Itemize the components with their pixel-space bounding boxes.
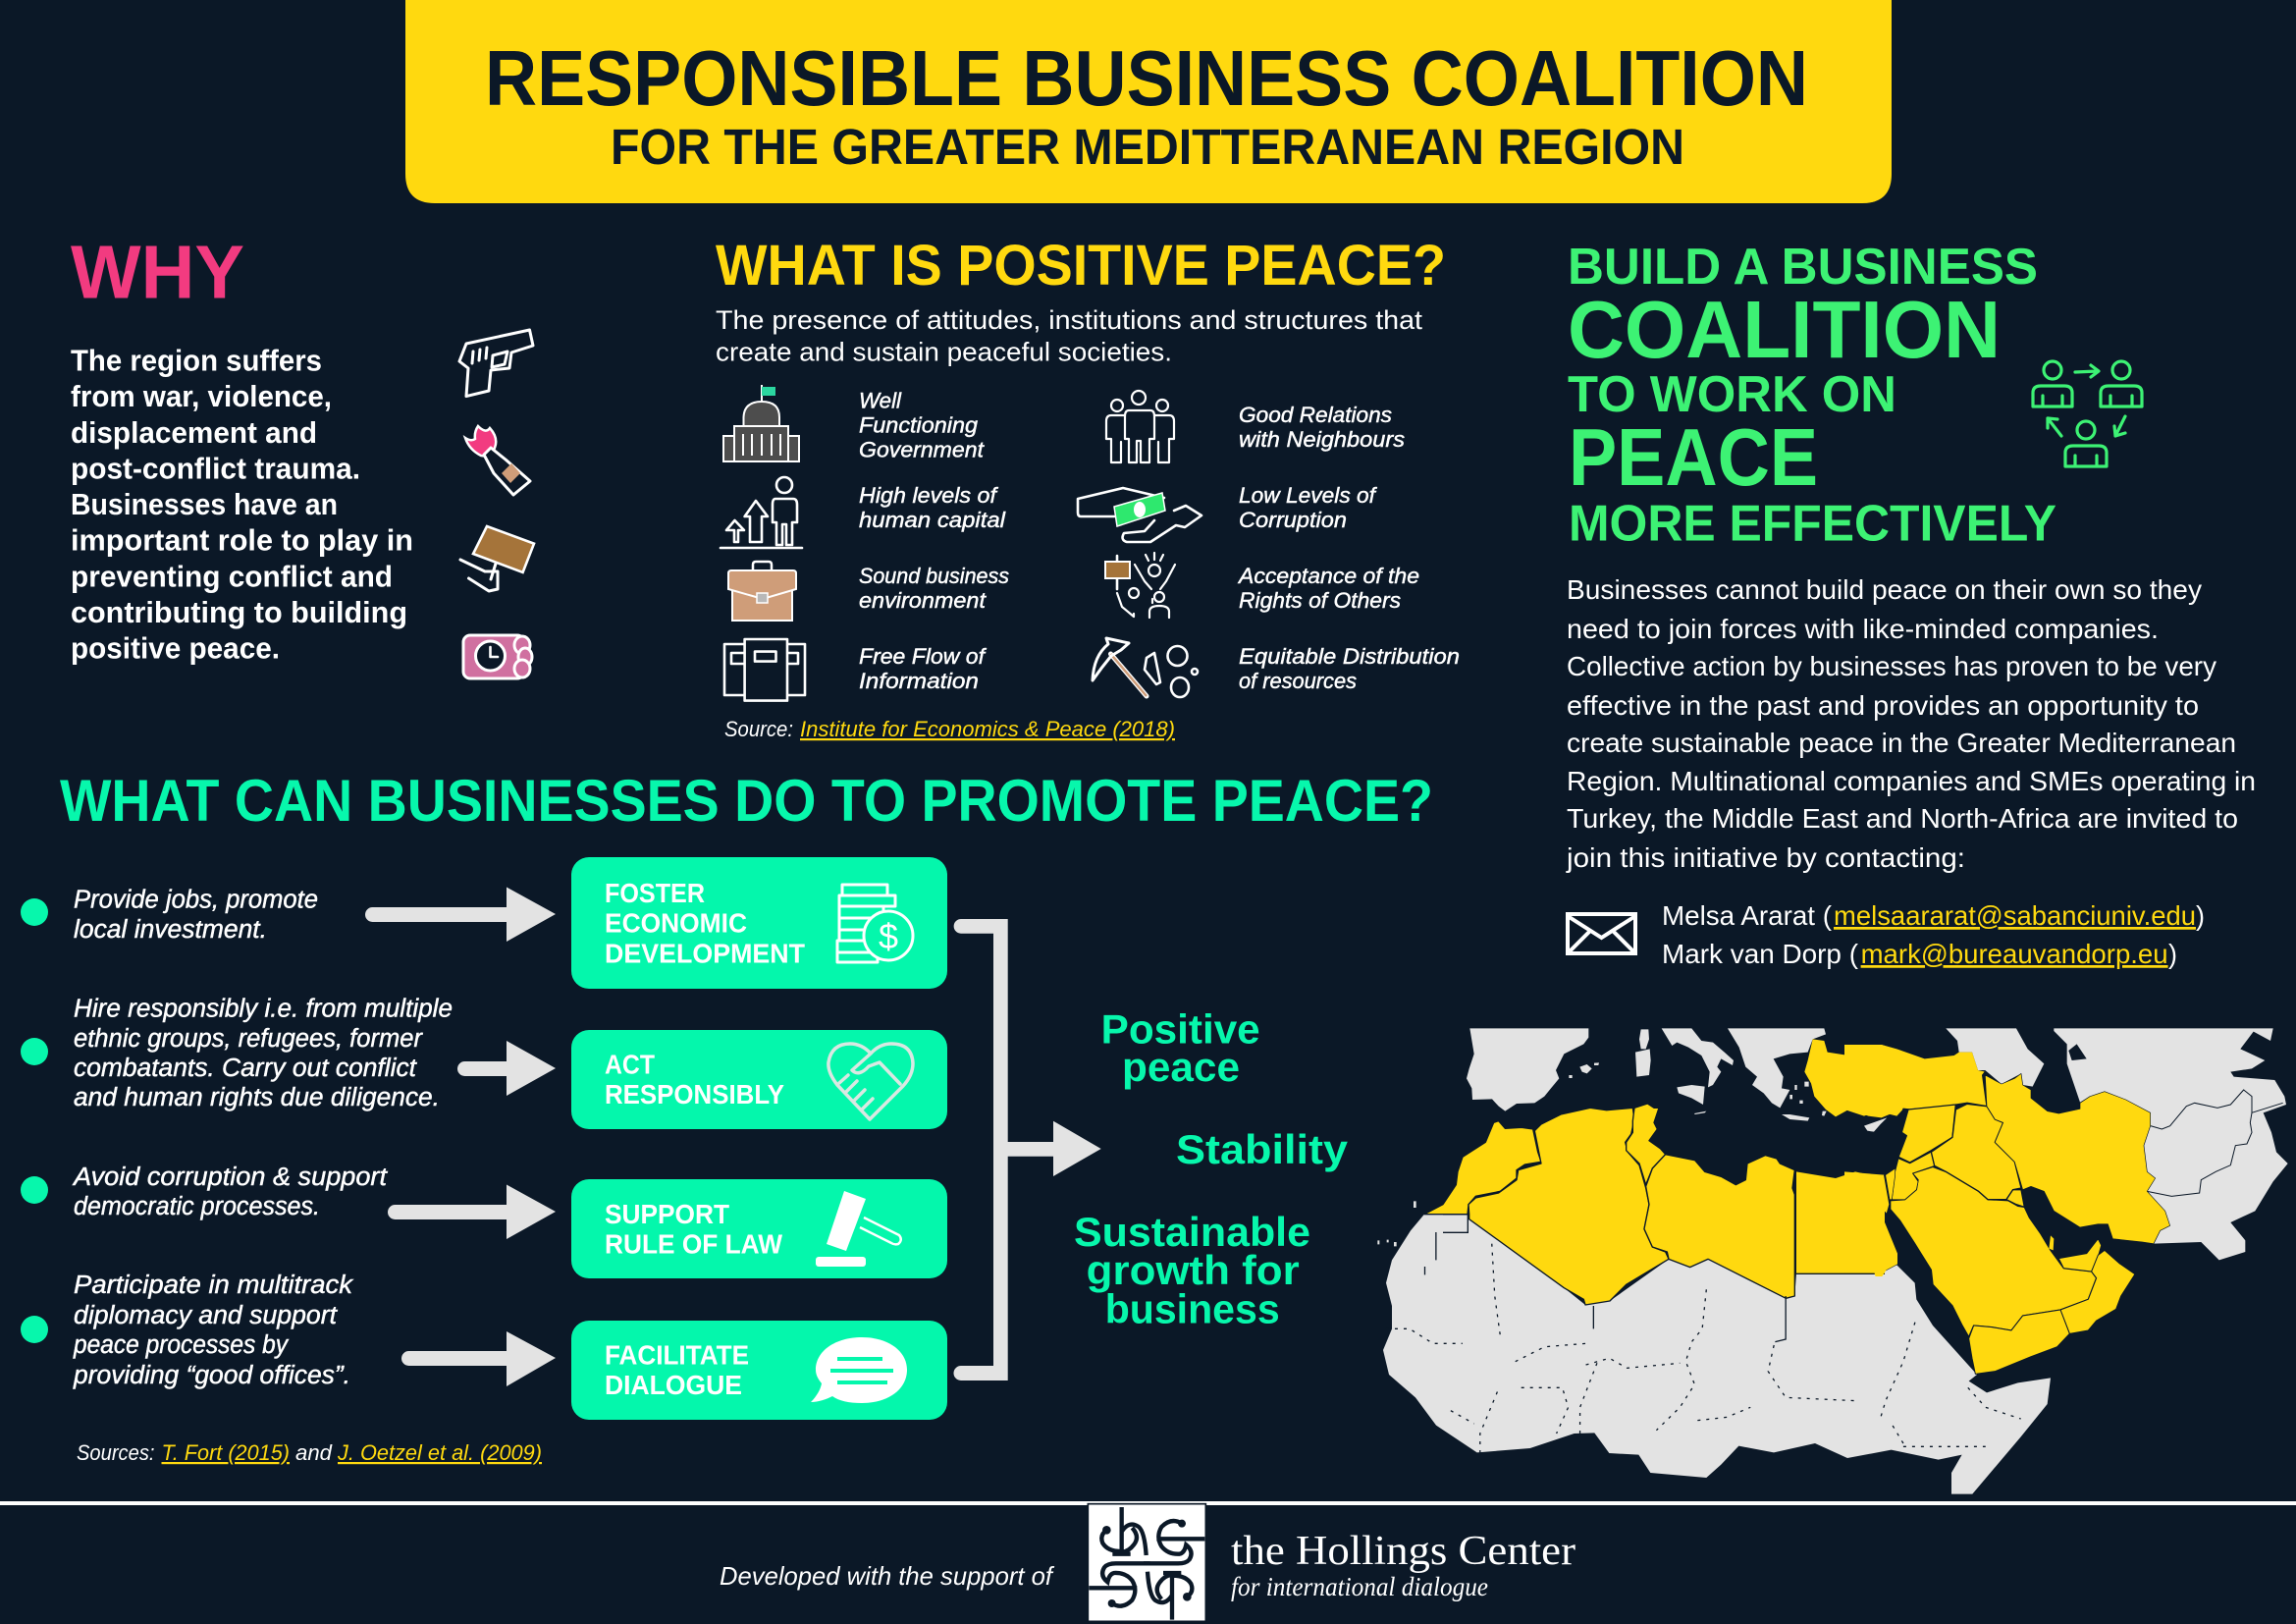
- text block: collective action: join this initiative by contacting:: [1566, 842, 1965, 873]
- heading: build a business coalition: TO WORK ON: [1568, 366, 1896, 423]
- text block: collective action: need to join forces with like-minded companies.: [1567, 614, 2159, 644]
- logo wordmark: the Hollings Center: [1231, 1529, 1575, 1574]
- row 3: avoid corruption: [21, 1164, 947, 1278]
- row 3: avoid corruption: democratic processes.: [74, 1193, 320, 1220]
- text block: collective action: Region. Multinational companies and SMEs operating in: [1567, 766, 2256, 796]
- outcomes: Stability: [1176, 1126, 1349, 1172]
- icon: briefcase: [728, 562, 796, 621]
- text block: definition: The presence of attitudes, institutions and structures that: [716, 305, 1423, 335]
- text block: why: positive peace.: [71, 631, 280, 666]
- heading: build a business coalition: COALITION: [1568, 284, 2001, 375]
- map: asia land: [1864, 1028, 2288, 1260]
- outcomes: Positive: [1101, 1006, 1260, 1053]
- row 3: avoid corruption: RULE OF LAW: [605, 1229, 782, 1259]
- sources line: Sources:: [77, 1440, 155, 1465]
- label: well functioning government: Well: [859, 389, 902, 413]
- row 1: provide jobs: DEVELOPMENT: [605, 939, 805, 968]
- map: african borders: [1386, 1232, 2021, 1453]
- label: well functioning government: Government: [859, 438, 985, 462]
- logo wordmark: for international dialogue: [1231, 1572, 1488, 1601]
- sources line: and: [295, 1440, 333, 1465]
- label: high levels of human capital: [859, 483, 1006, 532]
- footer divider: [0, 1501, 2296, 1505]
- text block: why: [71, 344, 413, 666]
- outcomes: peace: [1122, 1044, 1240, 1090]
- contact details: ): [2196, 900, 2205, 931]
- label: equitable distribution of resources: of resources: [1239, 669, 1357, 693]
- support text: Developed with the support of: [720, 1561, 1055, 1591]
- row 4: participate in multitrack diplomacy: [21, 1272, 947, 1420]
- label: high levels of human capital: human capital: [859, 508, 1006, 532]
- contact details: Mark van Dorp (: [1662, 939, 1858, 969]
- contact details: Melsa Ararat (: [1662, 900, 1832, 931]
- text block: definition: create and sustain peaceful societies.: [716, 338, 1172, 367]
- text block: definition: [716, 305, 1423, 367]
- heading: build a business coalition: [1568, 239, 2056, 553]
- outcomes: [1074, 1006, 1349, 1332]
- icon: pistol: [459, 330, 533, 397]
- outcomes: Sustainable: [1074, 1209, 1310, 1255]
- sources line: [77, 1440, 542, 1465]
- panel: build a business coalition: [1566, 239, 2256, 969]
- title: RESPONSIBLE BUSINESS COALITION: [485, 34, 1808, 122]
- contact details: [1662, 900, 2205, 969]
- text block: collective action: Collective action by businesses has proven to be very: [1567, 651, 2216, 681]
- icon: neighbours: [1106, 391, 1174, 462]
- source line: Institute for Economics & Peace (2018): [800, 717, 1175, 741]
- row 1: provide jobs: local investment.: [74, 916, 267, 944]
- row 4: participate in multitrack diplomacy: diplomacy and support: [74, 1302, 338, 1329]
- contact details: ): [2168, 939, 2177, 969]
- row 4: participate in multitrack diplomacy: FACILITATE: [605, 1339, 749, 1371]
- text block: why: from war, violence,: [71, 379, 332, 413]
- logo: hollings center monogram: [1088, 1504, 1205, 1621]
- icon: government building: [723, 385, 799, 461]
- heading: build a business coalition: PEACE: [1569, 411, 1818, 503]
- row 2: hire responsibly: RESPONSIBLY: [605, 1079, 784, 1110]
- row 4: participate in multitrack diplomacy: peace processes by: [73, 1331, 290, 1359]
- icon: human capital: [721, 477, 802, 548]
- label: acceptance of the rights of others: Acceptance of the: [1237, 564, 1419, 588]
- label: free flow of information: Information: [859, 669, 979, 693]
- icon: bribe: [1078, 488, 1201, 542]
- label: good relations with neighbours: with Neighbours: [1239, 427, 1405, 452]
- icon: rights of others: [1105, 553, 1175, 618]
- icon: envelope: [1568, 914, 1635, 953]
- outcomes: business: [1105, 1286, 1280, 1332]
- row 4: participate in multitrack diplomacy: providing “good offices”.: [73, 1362, 350, 1389]
- map: europe and north africa land: [1377, 1028, 2051, 1494]
- label: low levels of corruption: [1239, 483, 1378, 532]
- title banner: [405, 0, 1892, 203]
- label: acceptance of the rights of others: Rights of Others: [1239, 588, 1401, 613]
- row 2: hire responsibly: ethnic groups, refugees, former: [74, 1025, 423, 1053]
- row 2: hire responsibly: [21, 996, 947, 1129]
- label: well functioning government: [859, 389, 985, 462]
- row 2: hire responsibly: combatants. Carry out conflict: [74, 1055, 417, 1082]
- panel: why: [71, 231, 534, 678]
- source line: Source:: [724, 717, 793, 741]
- label: low levels of corruption: Corruption: [1239, 508, 1347, 532]
- outcomes: growth for: [1087, 1247, 1300, 1293]
- contact details: mark@bureauvandorp.eu: [1861, 939, 2168, 969]
- heading: why: WHY: [71, 231, 244, 315]
- row 1: provide jobs: [21, 857, 947, 989]
- subtitle: FOR THE GREATER MEDITTERANEAN REGION: [611, 119, 1684, 175]
- text block: collective action: effective in the past and provides an opportunity to: [1567, 690, 2199, 721]
- sources line: T. Fort (2015): [161, 1440, 290, 1465]
- text block: why: important role to play in: [71, 523, 413, 558]
- icon: protest sign: [460, 526, 534, 591]
- text block: collective action: Turkey, the Middle East and North-Africa are invited to: [1567, 803, 2238, 834]
- label: sound business environment: [859, 564, 1009, 613]
- label: low levels of corruption: Low Levels of: [1239, 483, 1378, 508]
- row 1: provide jobs: $: [879, 916, 898, 956]
- label: high levels of human capital: High levels of: [859, 483, 999, 508]
- text block: why: The region suffers: [71, 344, 322, 377]
- label: good relations with neighbours: Good Relations: [1239, 403, 1392, 427]
- label: free flow of information: [859, 644, 988, 693]
- panel: what is positive peace: [716, 234, 1460, 741]
- icon: three connected people: [2033, 361, 2142, 466]
- map: highlighted middle eastern countries: [1844, 1045, 2170, 1374]
- row 1: provide jobs: ECONOMIC: [605, 907, 747, 939]
- text block: why: contributing to building: [71, 595, 407, 629]
- label: free flow of information: Free Flow of: [859, 644, 988, 669]
- sources line: J. Oetzel et al. (2009): [337, 1440, 542, 1465]
- label: good relations with neighbours: [1239, 403, 1405, 452]
- row 1: provide jobs: FOSTER: [605, 878, 705, 908]
- row 3: avoid corruption: Avoid corruption & support: [72, 1164, 388, 1191]
- text block: why: preventing conflict and: [71, 560, 393, 593]
- text block: collective action: Businesses cannot build peace on their own so they: [1567, 574, 2202, 605]
- heading: what is positive peace: WHAT IS POSITIVE PEACE?: [716, 234, 1446, 298]
- footer: [720, 1504, 1575, 1621]
- bracket arrow: [954, 919, 1101, 1380]
- contact details: melsaararat@sabanciuniv.edu: [1834, 900, 2196, 931]
- icon: free flow of information: [724, 639, 805, 701]
- heading: build a business coalition: BUILD A BUSINESS: [1568, 239, 2038, 296]
- icon: pickaxe and resources: [1093, 638, 1198, 697]
- label: sound business environment: environment: [859, 588, 987, 613]
- row 3: avoid corruption: SUPPORT: [605, 1199, 729, 1229]
- map: highlighted north african countries: [1424, 1039, 1901, 1305]
- text block: collective action: create sustainable peace in the Greater Mediterranean: [1567, 728, 2236, 758]
- panel: what can businesses do: [21, 768, 1433, 1465]
- text block: why: Businesses have an: [71, 487, 338, 521]
- heading: build a business coalition: MORE EFFECTIVELY: [1569, 496, 2056, 553]
- row 2: hire responsibly: Hire responsibly i.e. from multiple: [74, 996, 453, 1023]
- label: sound business environment: Sound business: [859, 564, 1009, 588]
- heading: what can businesses do: WHAT CAN BUSINESSES DO TO PROMOTE PEACE?: [60, 768, 1433, 834]
- label: acceptance of the rights of others: [1237, 564, 1419, 613]
- row 2: hire responsibly: ACT: [605, 1049, 655, 1080]
- icon: molotov cocktail: [465, 426, 530, 495]
- icon: time bomb: [463, 635, 532, 678]
- row 2: hire responsibly: and human rights due diligence.: [74, 1084, 440, 1111]
- row 4: participate in multitrack diplomacy: DIALOGUE: [605, 1370, 742, 1400]
- logo wordmark: [1231, 1529, 1575, 1601]
- map: [1377, 1028, 2288, 1494]
- label: equitable distribution of resources: [1239, 644, 1460, 693]
- label: equitable distribution of resources: Equitable Distribution: [1239, 644, 1460, 669]
- row 1: provide jobs: Provide jobs, promote: [74, 886, 318, 913]
- text block: collective action: [1566, 574, 2256, 873]
- row 4: participate in multitrack diplomacy: Participate in multitrack: [74, 1272, 353, 1299]
- text block: why: post-conflict trauma.: [71, 452, 360, 485]
- text block: why: displacement and: [71, 415, 317, 450]
- label: well functioning government: Functioning: [859, 413, 979, 438]
